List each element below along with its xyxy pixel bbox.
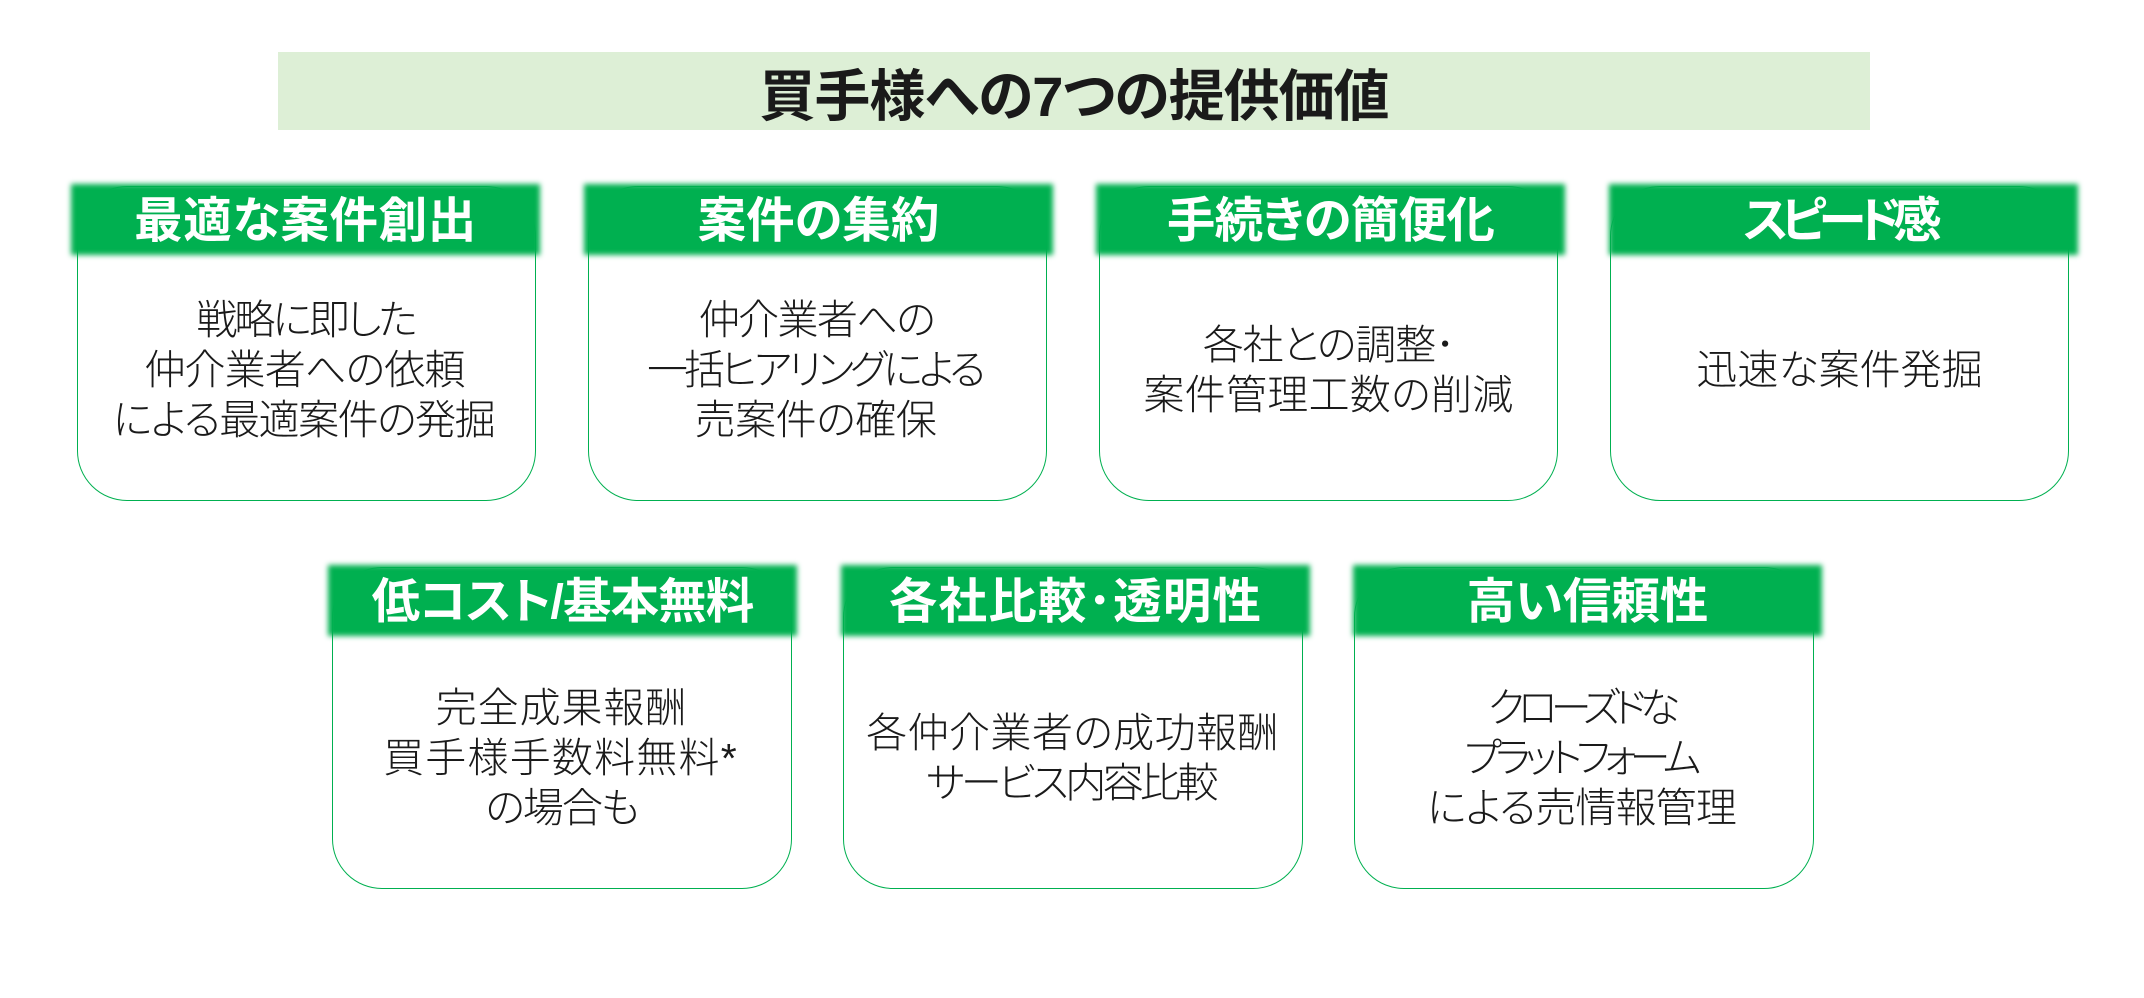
text block: 最適な案件創出: による最適案件の発掘: [113, 396, 494, 442]
panel: スピード感: [1604, 180, 2082, 501]
panel: 案件の集約: [580, 180, 1058, 501]
text block: 各社比較・透明性: 各仲介業者の成功報酬: [866, 710, 1279, 756]
heading: 最適な案件創出: 最適な案件創出: [134, 194, 477, 248]
text block: 最適な案件創出: 戦略に即した: [196, 296, 415, 342]
heading: 手続きの簡便化: 手続きの簡便化: [1167, 194, 1494, 248]
text block: 低コスト/基本無料: の場合も: [485, 784, 638, 830]
text block: 案件の集約: 一括ヒアリングによる: [647, 346, 982, 392]
panel: 低コスト/基本無料: [324, 560, 802, 889]
text block: 低コスト/基本無料: 完全成果報酬: [436, 684, 687, 730]
text block: 手続きの簡便化: [1143, 322, 1514, 418]
text block: 各社比較・透明性: サービス内容比較: [926, 760, 1215, 806]
title banner: 買手様への7つの提供価値: [759, 65, 1389, 128]
text block: 案件の集約: 売案件の確保: [695, 396, 936, 442]
text block: 案件の集約: 仲介業者への: [699, 296, 934, 342]
text block: スピード感: 迅速な案件発掘: [1696, 346, 1983, 392]
title banner: [278, 52, 1870, 130]
text block: 各社比較・透明性: [866, 710, 1279, 806]
text block: 高い信頼性: クローズドな: [1488, 684, 1673, 730]
heading: スピード感: スピード感: [1743, 194, 1934, 248]
text block: 低コスト/基本無料: [383, 684, 738, 830]
panel: 手続きの簡便化: [1092, 180, 1570, 501]
text block: 高い信頼性: による売情報管理: [1427, 784, 1736, 830]
text block: 高い信頼性: [1427, 684, 1736, 830]
text block: 最適な案件創出: 仲介業者への依頼: [144, 346, 465, 392]
text block: 高い信頼性: プラットフォーム: [1464, 734, 1695, 780]
text block: 手続きの簡便化: 各社との調整･: [1203, 322, 1454, 368]
text block: 手続きの簡便化: 案件管理工数の削減: [1143, 372, 1514, 418]
panel: 最適な案件創出: [66, 180, 544, 501]
text block: 低コスト/基本無料: 買手様手数料無料*: [383, 734, 738, 780]
text block: 最適な案件創出: [113, 296, 494, 442]
heading: 案件の集約: 案件の集約: [698, 194, 939, 248]
panel: 各社比較・透明性: [836, 560, 1314, 889]
heading: 高い信頼性: 高い信頼性: [1467, 575, 1708, 629]
heading: 低コスト/基本無料: 低コスト/基本無料: [372, 575, 753, 629]
heading: 各社比較・透明性: 各社比較･透明性: [889, 575, 1262, 629]
panel: 高い信頼性: [1348, 560, 1826, 889]
text block: 案件の集約: [647, 296, 982, 442]
